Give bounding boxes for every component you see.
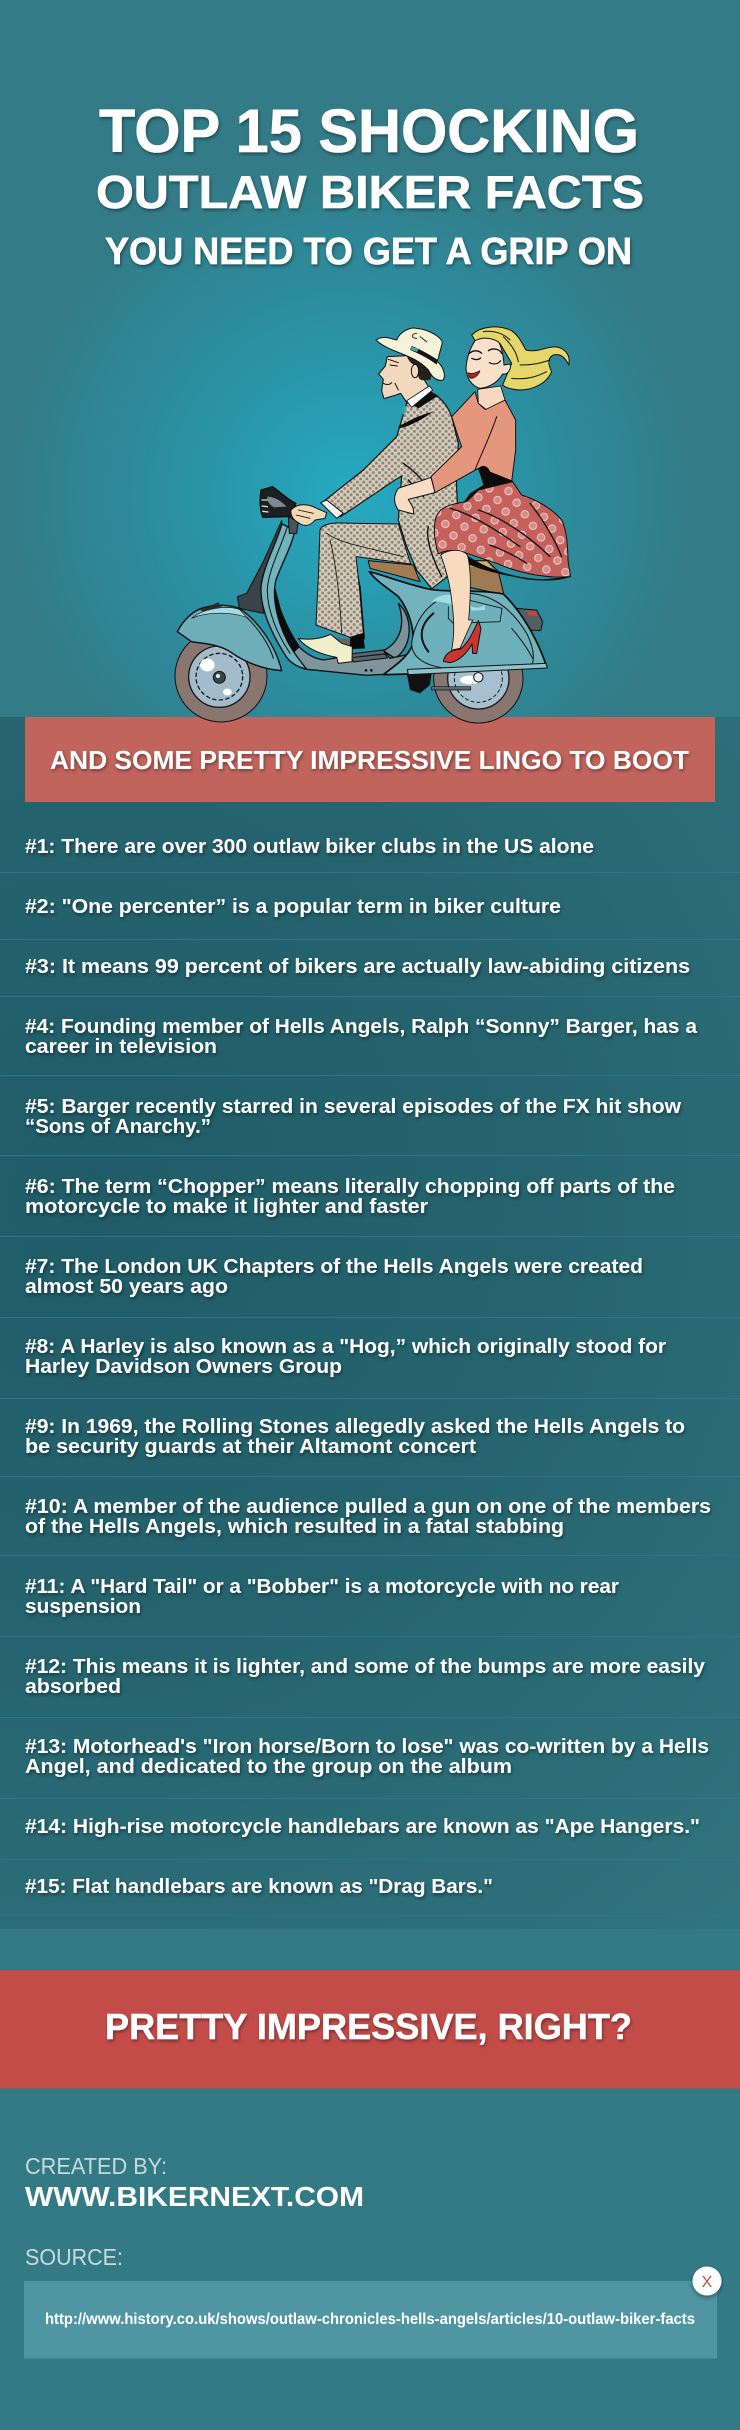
fact 4: career in television (25, 1035, 217, 1058)
facts panel background (0, 717, 740, 1929)
scooter handlebar (260, 487, 298, 533)
fact 7 (25, 1255, 643, 1298)
fact 13: Angel, and dedicated to the group on the album (25, 1755, 512, 1778)
created by credit: CREATED BY: (25, 2153, 167, 2179)
fact 12: absorbed (25, 1675, 121, 1698)
fact 3: #3: It means 99 percent of bikers are actually law-abiding citizens (25, 955, 690, 978)
rear wheel (434, 634, 523, 723)
list of facts (25, 835, 711, 1898)
scooter seat (368, 561, 504, 595)
title: TOP 15 SHOCKING (99, 97, 639, 165)
created by credit (25, 2153, 364, 2212)
scooter steering column (237, 521, 307, 669)
man: head (376, 328, 444, 415)
man: hand on grip (291, 505, 327, 525)
fact 13 (25, 1735, 709, 1778)
fact 11: suspension (25, 1595, 141, 1618)
fact 12 (25, 1655, 706, 1698)
fact 5: “Sons of Anarchy.” (25, 1115, 211, 1138)
fact 8: #8: A Harley is also known as a "Hog,” which originally stood for (25, 1335, 666, 1358)
fact 9: be security guards at their Altamont concert (25, 1435, 476, 1458)
man: jacket (321, 390, 458, 589)
source label: SOURCE: (25, 2244, 123, 2270)
fact 13: #13: Motorhead's "Iron horse/Born to lose" was co-written by a Hells (25, 1735, 709, 1758)
fact 7: #7: The London UK Chapters of the Hells Angels were created (25, 1255, 643, 1278)
fact 1: #1: There are over 300 outlaw biker clubs in the US alone (25, 835, 594, 858)
fact 2: #2: "One percenter” is a popular term in biker culture (25, 895, 561, 918)
woman: skirt (434, 482, 572, 581)
created by credit: WWW.BIKERNEXT.COM (25, 2181, 364, 2212)
source link box (24, 2281, 717, 2358)
title: OUTLAW BIKER FACTS (96, 166, 644, 218)
fact 7: almost 50 years ago (25, 1275, 228, 1298)
woman: hand on man's waist (395, 477, 435, 514)
fact 10: of the Hells Angels, which resulted in a fatal stabbing (25, 1515, 564, 1538)
fact 11: #11: A "Hard Tail" or a "Bobber" is a motorcycle with no rear (25, 1575, 619, 1598)
woman: sweater (431, 386, 516, 503)
engine and kickstand (407, 673, 471, 693)
fact 6: motorcycle to make it lighter and faster (25, 1195, 428, 1218)
fact 8 (25, 1335, 666, 1378)
woman: hair (472, 327, 569, 390)
closing banner: PRETTY IMPRESSIVE, RIGHT? (105, 2006, 632, 2047)
scooter body (369, 572, 547, 675)
illustration: couple riding a scooter (175, 327, 572, 723)
source link box: http://www.history.co.uk/shows/outlaw-chronicles-hells-angels/articles/10-outlaw-biker-facts (45, 2311, 695, 2328)
hero background (0, 0, 740, 717)
fact 9: #9: In 1969, the Rolling Stones allegedly asked the Hells Angels to (25, 1415, 685, 1438)
fact 14: #14: High-rise motorcycle handlebars are known as "Ape Hangers." (25, 1815, 700, 1838)
fact 6 (25, 1175, 675, 1218)
woman: face (466, 338, 510, 388)
subheading banner: AND SOME PRETTY IMPRESSIVE LINGO TO BOOT (50, 747, 689, 775)
close button icon (692, 2266, 722, 2296)
scooter inner arc and floorboard (285, 603, 413, 675)
front wheel (175, 630, 267, 722)
fact 12: #12: This means it is lighter, and some of the bumps are more easily (25, 1655, 706, 1678)
fact 6: #6: The term “Chopper” means literally chopping off parts of the (25, 1175, 675, 1198)
title (96, 97, 644, 273)
close button icon: X (702, 2274, 713, 2291)
subheading banner (25, 717, 715, 802)
fact 4: #4: Founding member of Hells Angels, Ralph “Sonny” Barger, has a (25, 1015, 698, 1038)
man: hat (376, 328, 444, 380)
divider lines (0, 872, 740, 1916)
man: trousers and shoes (298, 523, 411, 663)
fact 5: #5: Barger recently starred in several episodes of the FX hit show (25, 1095, 681, 1118)
tail light (516, 608, 543, 631)
fact 8: Harley Davidson Owners Group (25, 1355, 342, 1378)
title: YOU NEED TO GET A GRIP ON (105, 231, 632, 273)
fact 11 (25, 1575, 619, 1618)
woman: leg and red shoe (441, 550, 481, 663)
fact 9 (25, 1415, 685, 1458)
fact 15: #15: Flat handlebars are known as "Drag Bars." (25, 1875, 493, 1898)
fact 10 (25, 1495, 711, 1538)
fact 10: #10: A member of the audience pulled a gun on one of the members (25, 1495, 711, 1518)
closing banner (0, 1970, 740, 2088)
front fender (177, 602, 282, 671)
fact 4 (25, 1015, 698, 1058)
fact 5 (25, 1095, 681, 1138)
